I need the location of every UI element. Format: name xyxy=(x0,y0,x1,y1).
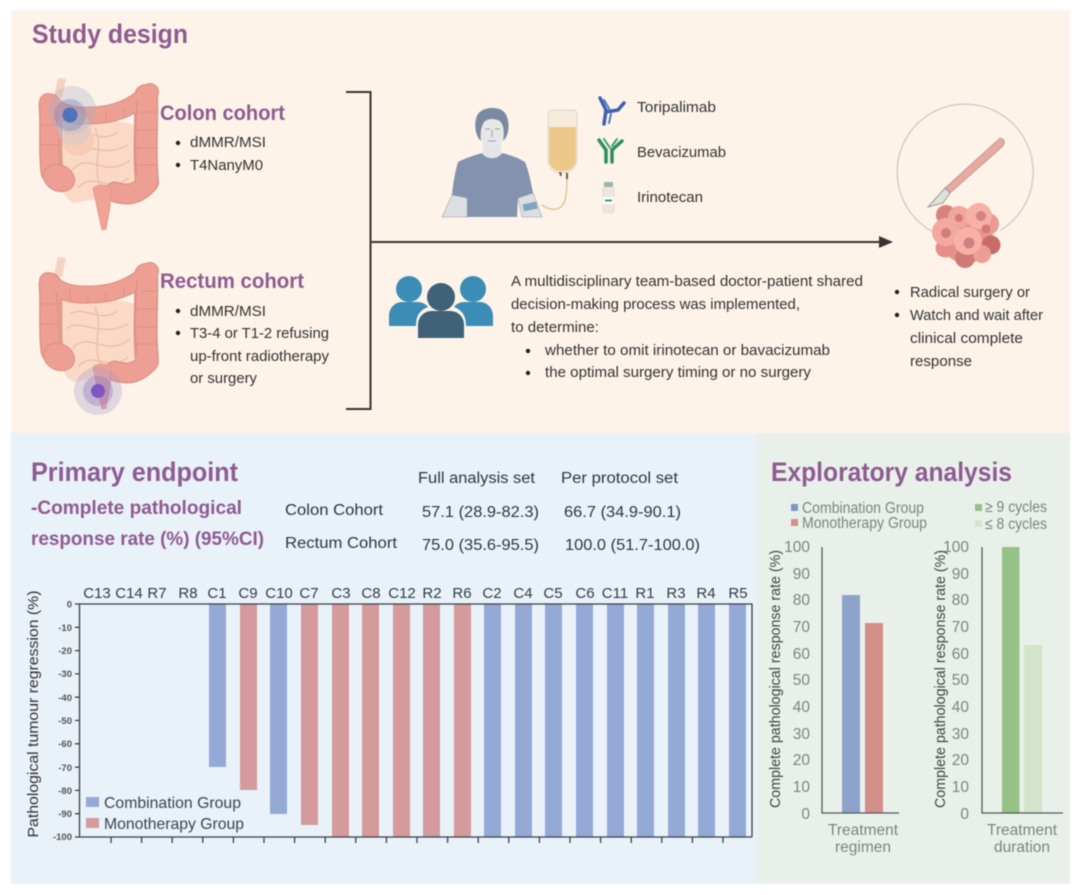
panel: exploratory analysis xyxy=(757,433,1070,884)
bar chart: treatment duration: 40 xyxy=(952,699,969,716)
table: response rates: Rectum Cohort xyxy=(285,535,398,552)
bar chart: treatment duration: 10 xyxy=(952,779,969,796)
patient labels xyxy=(83,585,748,602)
patient labels: C12 xyxy=(388,585,416,602)
text: surgery options xyxy=(895,285,1043,370)
patient labels: R2 xyxy=(422,585,442,602)
text: shared decision-making: whether to omit irinotecan or bavacizumab xyxy=(544,343,830,359)
bar chart: treatment regimen: 50 xyxy=(793,672,810,689)
text: colon criteria xyxy=(176,135,266,174)
patient labels: C4 xyxy=(513,585,533,602)
patient labels: R6 xyxy=(452,585,472,602)
subheading: complete pathological response rate: -Complete pathological xyxy=(31,497,242,519)
bar chart: treatment regimen: 60 xyxy=(793,646,810,663)
bar chart: treatment duration: Treatment xyxy=(987,822,1058,839)
patient labels: C6 xyxy=(575,585,595,602)
y axis ticks: -20 xyxy=(58,646,72,657)
table: response rates: Full analysis set xyxy=(418,470,536,487)
bar chart: treatment regimen: 20 xyxy=(793,752,810,769)
heading: study design: Study design xyxy=(32,19,188,49)
heading: colon cohort: Colon cohort xyxy=(160,102,285,125)
legend: treatment regimen: Combination Group xyxy=(802,500,924,517)
patient labels: C14 xyxy=(115,585,143,602)
text: rectum criteria: or surgery xyxy=(190,371,258,387)
icon: colon with rectal tumour xyxy=(39,257,158,415)
table: response rates: Per protocol set xyxy=(561,470,679,487)
y axis ticks: -90 xyxy=(58,809,72,820)
label: bevacizumab: Bevacizumab xyxy=(637,145,726,161)
patient labels: C2 xyxy=(482,585,502,602)
bar chart: treatment regimen: Complete pathological response rate (%) xyxy=(768,550,784,808)
patient labels: R1 xyxy=(635,585,655,602)
legend: treatment duration: ≤ 8 cycles xyxy=(985,516,1047,533)
icon: infusion bag xyxy=(542,110,577,209)
bar chart: treatment regimen: 30 xyxy=(793,726,810,743)
table: response rates: 57.1 (28.9-82.3) xyxy=(422,504,539,521)
text: rectum criteria: up-front radiotherapy xyxy=(190,349,330,365)
y axis ticks xyxy=(53,600,72,843)
y axis ticks: -50 xyxy=(58,716,72,727)
y axis ticks: -60 xyxy=(58,739,72,750)
legend: Monotherapy Group xyxy=(104,816,244,833)
table: response rates: 100.0 (51.7-100.0) xyxy=(565,537,700,554)
label: irinotecan: Irinotecan xyxy=(637,190,703,206)
patient labels: R7 xyxy=(147,585,167,602)
bar chart: treatment regimen: regimen xyxy=(835,839,891,856)
text: surgery options: Watch and wait after xyxy=(910,308,1043,324)
text: shared decision-making: the optimal surgery timing or no surgery xyxy=(545,365,812,381)
icon: antibody toripalimab xyxy=(600,98,624,124)
patient labels: R8 xyxy=(178,585,198,602)
y axis ticks: -80 xyxy=(58,786,72,797)
heading: exploratory analysis: Exploratory analysis xyxy=(771,457,1012,487)
bar chart: treatment duration: 70 xyxy=(952,619,969,636)
patient labels: C9 xyxy=(238,585,258,602)
icon: team of people xyxy=(389,276,493,338)
bar chart: treatment duration: 80 xyxy=(952,592,969,609)
legend: Combination Group xyxy=(104,795,241,812)
text: shared decision-making: decision-making process was implemented, xyxy=(511,297,800,313)
patient labels: C3 xyxy=(331,585,351,602)
bars xyxy=(209,604,746,837)
bar chart: treatment regimen: 70 xyxy=(793,619,810,636)
y axis ticks: 0 xyxy=(67,600,72,610)
bar chart: treatment duration: 60 xyxy=(952,646,969,663)
patient labels: C8 xyxy=(361,585,381,602)
panel: primary endpoint xyxy=(11,433,757,884)
y axis ticks: -10 xyxy=(58,623,72,634)
subheading: complete pathological response rate xyxy=(31,497,264,550)
patient labels: C11 xyxy=(602,585,628,602)
bar chart: treatment duration: 20 xyxy=(952,752,969,769)
icon: scalpel and tumour xyxy=(897,104,1033,268)
text: shared decision-making: A multidisciplinary team-based doctor-patient shared xyxy=(511,274,863,290)
y axis ticks: -100 xyxy=(53,832,72,843)
legend: treatment duration: ≥ 9 cycles xyxy=(985,499,1047,516)
label: toripalimab: Toripalimab xyxy=(637,100,716,116)
bar chart: treatment regimen: 100 xyxy=(784,539,810,556)
subheading: complete pathological response rate: response rate (%) (95%CI) xyxy=(31,528,264,550)
waterfall chart: pathological tumour regression xyxy=(26,585,752,843)
bar chart: treatment duration: 30 xyxy=(952,726,969,743)
y axis ticks: -30 xyxy=(58,669,72,680)
heading: primary endpoint: Primary endpoint xyxy=(31,457,238,487)
patient labels: R5 xyxy=(728,585,748,602)
icon: irinotecan vial xyxy=(603,182,614,213)
table: response rates: 66.7 (34.9-90.1) xyxy=(564,504,681,521)
bar chart: treatment duration: Complete pathological response rate (%) xyxy=(933,550,949,808)
bar chart: treatment regimen: 0 xyxy=(801,806,810,823)
bar chart: treatment duration: 90 xyxy=(952,566,969,583)
icon: antibody bevacizumab xyxy=(599,139,622,162)
text: shared decision-making xyxy=(511,274,863,381)
text: rectum criteria: dMMR/MSI xyxy=(190,304,266,320)
table: response rates: Colon Cohort xyxy=(285,502,384,519)
bar chart: treatment duration: 0 xyxy=(960,806,969,823)
icon: patient receiving infusion xyxy=(442,108,542,217)
patient labels: C13 xyxy=(83,585,111,602)
text: surgery options: response xyxy=(910,354,972,370)
heading: rectum cohort: Rectum cohort xyxy=(160,270,304,293)
legend xyxy=(86,795,244,833)
bar chart: treatment regimen: 10 xyxy=(793,779,810,796)
y axis ticks: -70 xyxy=(58,763,72,774)
bar chart: treatment duration: duration xyxy=(994,839,1050,856)
bar chart: treatment regimen: 40 xyxy=(793,699,810,716)
patient labels: R3 xyxy=(666,585,686,602)
patient labels: C1 xyxy=(207,585,227,602)
bar chart: treatment regimen: Treatment xyxy=(828,822,899,839)
legend: treatment regimen: Monotherapy Group xyxy=(802,515,927,532)
text: rectum criteria: T3-4 or T1-2 refusing xyxy=(190,326,329,342)
bar chart: treatment regimen xyxy=(768,539,899,856)
bar chart: treatment regimen: 80 xyxy=(793,592,810,609)
table: response rates xyxy=(285,470,700,554)
bar chart: treatment duration: 50 xyxy=(952,672,969,689)
bar chart: treatment duration xyxy=(933,539,1063,856)
legend: treatment regimen xyxy=(791,500,927,532)
legend: treatment duration xyxy=(975,499,1047,533)
table: response rates: 75.0 (35.6-95.5) xyxy=(422,537,539,554)
text: colon criteria: dMMR/MSI xyxy=(190,135,266,151)
bar chart: treatment duration: 100 xyxy=(943,539,969,556)
bar chart: treatment regimen: 90 xyxy=(793,566,810,583)
text: rectum criteria xyxy=(176,304,330,387)
y axis title: Pathological tumour regression (%) xyxy=(26,590,42,838)
patient labels: C10 xyxy=(265,585,293,602)
patient labels: C7 xyxy=(299,585,319,602)
icon: colon with tumour xyxy=(39,78,158,230)
text: surgery options: Radical surgery or xyxy=(910,285,1030,301)
patient labels: C5 xyxy=(543,585,563,602)
y axis ticks: -40 xyxy=(58,693,72,704)
text: shared decision-making: to determine: xyxy=(511,320,599,336)
panel: study design xyxy=(11,10,1070,433)
bracket and arrow xyxy=(346,92,893,409)
text: surgery options: clinical complete xyxy=(910,331,1023,347)
text: colon criteria: T4NanyM0 xyxy=(190,158,263,174)
patient labels: R4 xyxy=(696,585,716,602)
